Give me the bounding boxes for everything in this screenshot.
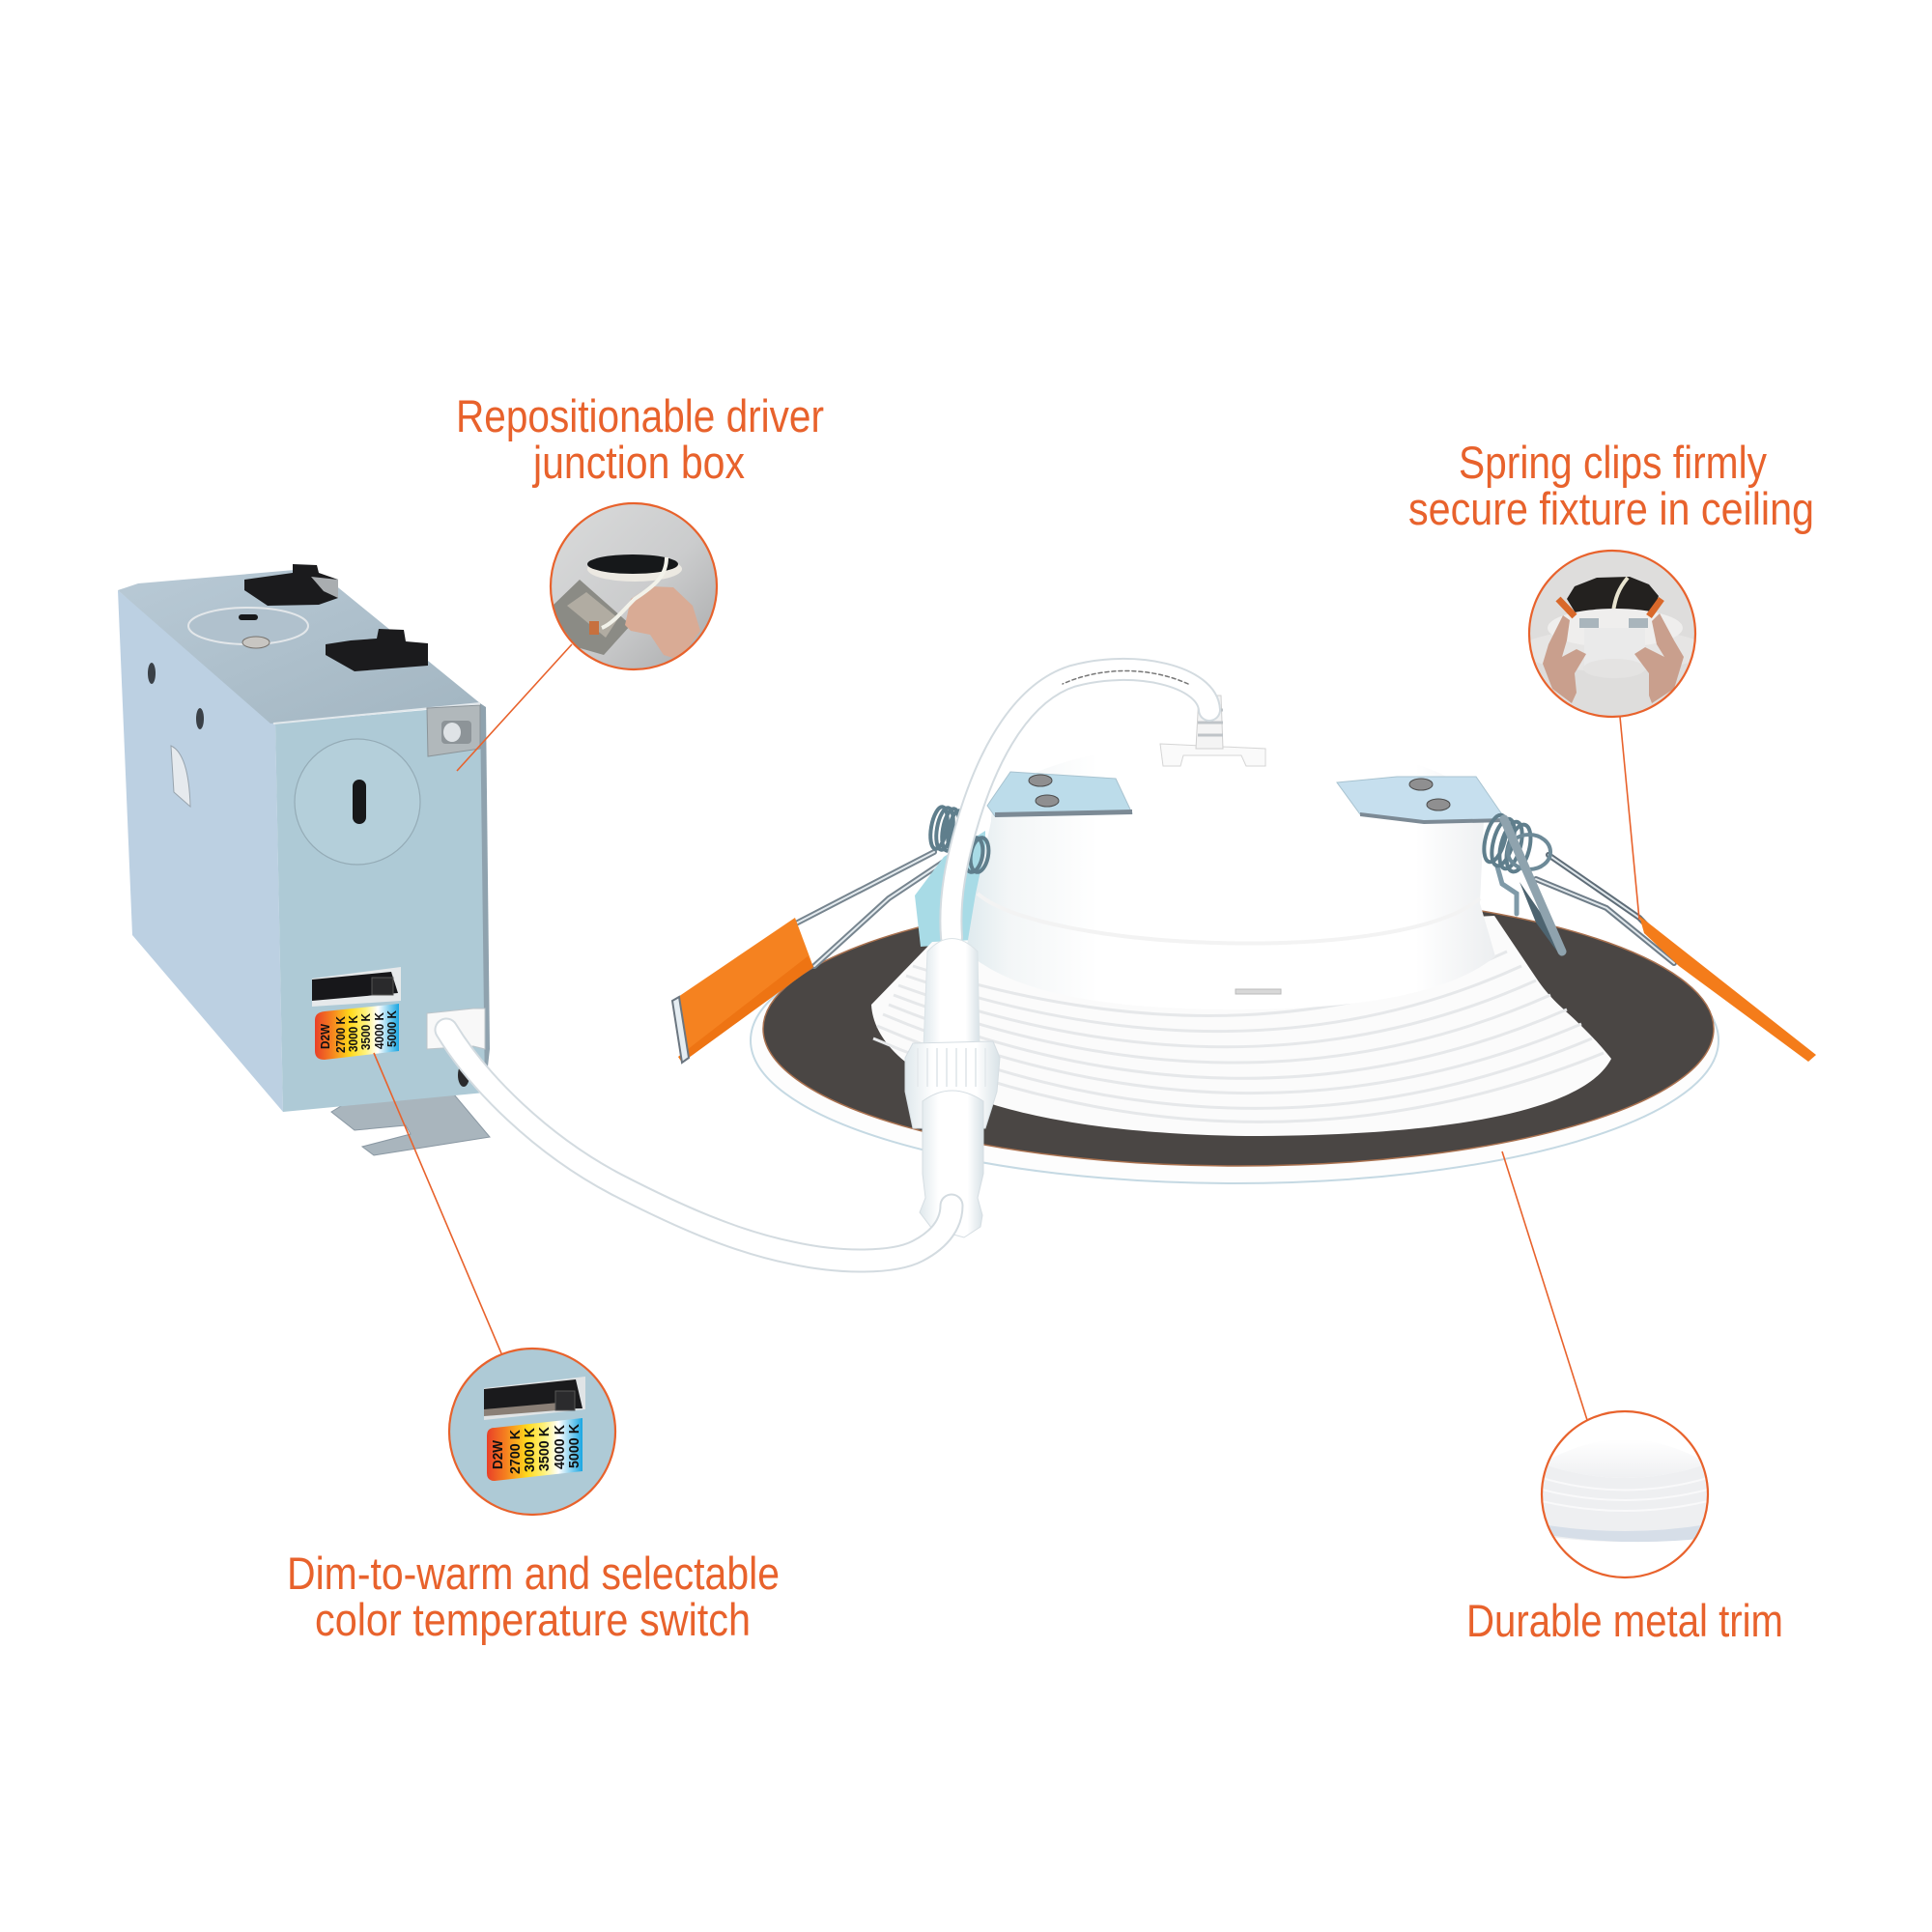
left bracket	[987, 772, 1132, 817]
zoomed label	[487, 1418, 582, 1481]
lower white cord	[446, 1030, 952, 1261]
housing shoulder	[978, 894, 1480, 944]
right coil spring	[1480, 812, 1550, 874]
label: spring clips: secure fixture in ceiling	[1408, 483, 1814, 534]
label: dim-to-warm: Dim-to-warm and selectable	[287, 1548, 780, 1599]
top knockout	[188, 608, 308, 648]
junction box	[118, 564, 490, 1155]
zoomed label: 3000 K	[522, 1428, 538, 1472]
zoomed switch	[484, 1377, 585, 1420]
recessed light fixture	[672, 669, 1816, 1237]
label: spring clips	[1408, 437, 1814, 534]
box side face	[118, 590, 283, 1112]
leader line: spring clips	[1620, 717, 1639, 920]
right bracket	[1337, 777, 1506, 824]
orange clip left	[672, 918, 813, 1063]
baffle steps	[873, 952, 1604, 1122]
front edge highlight	[273, 703, 480, 724]
slider	[372, 978, 393, 995]
switch window	[312, 967, 401, 1007]
zoomed label: D2W	[490, 1439, 506, 1469]
front knockout	[295, 739, 420, 865]
zoomed label: 3500 K	[536, 1427, 553, 1471]
connector upper mould	[923, 939, 980, 1048]
cord socket	[427, 1009, 485, 1087]
color temperature label: 2700 K	[334, 1016, 348, 1053]
side tab	[171, 746, 190, 807]
label: spring clips: Spring clips firmly	[1459, 437, 1767, 488]
label: repositionable driver junction box: junction box	[531, 437, 745, 488]
top connector block	[1160, 696, 1265, 766]
label: dim-to-warm	[287, 1548, 780, 1645]
label: durable metal trim: Durable metal trim	[1466, 1595, 1783, 1646]
label: repositionable driver junction box	[456, 390, 824, 488]
right spring prong	[1504, 819, 1562, 952]
orange clip right	[1639, 916, 1816, 1062]
corner screw plate	[427, 705, 480, 756]
box top face	[118, 570, 480, 724]
knockout slot	[353, 780, 366, 824]
callout circle: installing junction box	[549, 502, 719, 670]
housing body	[966, 743, 1495, 1009]
nut ridges	[918, 1048, 985, 1087]
left coil spring	[927, 806, 991, 873]
black clip front	[326, 629, 428, 671]
color temperature label: 3500 K	[359, 1013, 373, 1050]
zoomed label: 5000 K	[566, 1424, 582, 1468]
leader line: color switch	[374, 1053, 501, 1353]
side holes	[148, 663, 204, 729]
stepped baffle	[871, 916, 1611, 1136]
label: repositionable driver junction box: Repositionable driver	[456, 390, 824, 441]
box right flange	[480, 703, 490, 1093]
upper cable	[951, 669, 1209, 937]
white connector	[905, 939, 1000, 1237]
zoomed label: 2700 K	[507, 1430, 524, 1474]
leader line: driver junction box	[457, 644, 572, 771]
box mounting foot	[331, 1094, 490, 1155]
connector nut	[905, 1041, 1000, 1128]
color temperature label: D2W	[319, 1024, 332, 1049]
callout circle: metal trim	[1542, 1411, 1708, 1577]
color temperature label: 3000 K	[347, 1015, 360, 1052]
blue reflection behind body	[915, 831, 985, 947]
callout circle: spring clips in ceiling	[1528, 549, 1696, 719]
right spring wires	[1497, 855, 1681, 963]
left spring wires	[792, 852, 944, 966]
switch slot	[312, 972, 398, 1001]
color temperature label: 5000 K	[385, 1010, 399, 1047]
color temperature label: 4000 K	[373, 1012, 386, 1049]
black clip back	[244, 564, 338, 606]
color temperature label	[315, 1004, 399, 1060]
metal tab on clip	[311, 577, 338, 598]
label: dim-to-warm: color temperature switch	[315, 1594, 751, 1645]
callout circle: color temperature switch	[449, 1349, 615, 1515]
metal trim flange	[751, 897, 1719, 1183]
connector lower tube	[920, 1091, 983, 1237]
zoomed label: 4000 K	[552, 1425, 568, 1469]
leader line: metal trim	[1502, 1151, 1587, 1420]
small slot	[1236, 989, 1281, 994]
gasket ring	[763, 892, 1714, 1166]
box front face	[275, 705, 485, 1112]
